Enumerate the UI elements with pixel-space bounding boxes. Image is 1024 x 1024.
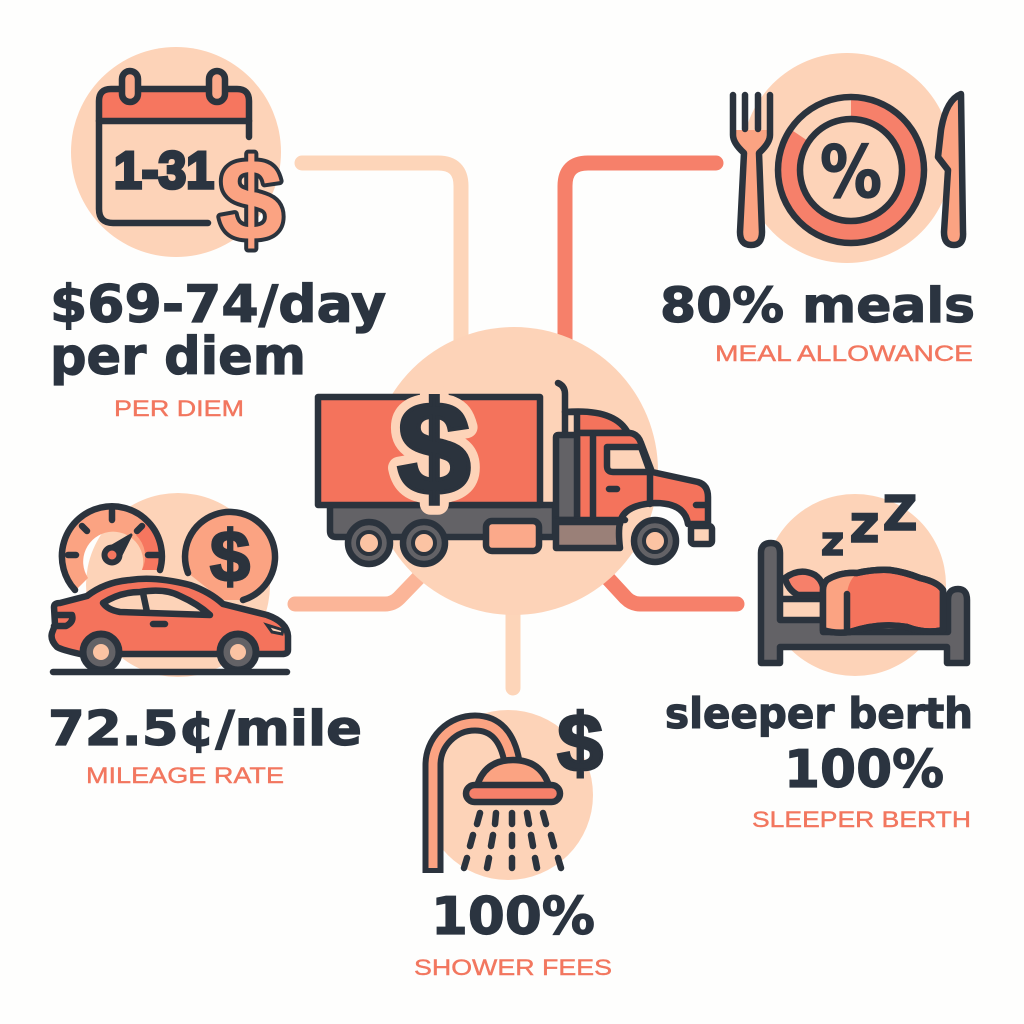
label: sleeper berth: SLEEPER BERTH — [752, 807, 971, 832]
icon: bed with zzz: z — [849, 495, 880, 555]
trailer dollar sign: $ — [397, 375, 471, 522]
connector: per diem to truck — [302, 163, 461, 345]
icon: speedometer, coin and car — [52, 493, 288, 677]
label: meal allowance: MEAL ALLOWANCE — [715, 341, 973, 366]
truck trailer — [318, 397, 540, 505]
icon: bed with zzz: z — [821, 519, 844, 565]
speedometer — [62, 505, 162, 590]
icon: plate and cutlery: % — [820, 130, 882, 214]
trailer dollar sign halo: $ — [397, 375, 471, 522]
icon: plate and cutlery — [733, 53, 963, 263]
connector: mileage to truck — [295, 572, 424, 604]
coin — [185, 512, 275, 600]
icon: shower with dollar — [423, 698, 603, 880]
truck cab — [565, 411, 628, 433]
icon: speedometer, coin and car: $ — [210, 517, 250, 597]
heading: sleeper 100 percent: 100% — [784, 740, 944, 800]
icon: calendar with dollar: $ — [219, 135, 283, 265]
truck tank — [486, 521, 539, 551]
heading: shower 100 percent: 100% — [431, 887, 595, 947]
heading: sleeper berth: sleeper berth — [665, 689, 973, 738]
connector: sleeper to truck — [602, 572, 737, 604]
connector: meals to truck — [565, 163, 716, 345]
icon: calendar with dollar — [71, 47, 283, 265]
heading: mileage rate value: 72.5¢/mile — [48, 701, 362, 757]
connector: shower to truck — [506, 600, 520, 688]
label: per diem: PER DIEM — [114, 396, 244, 421]
icon: shower with dollar: $ — [557, 698, 603, 789]
icon: bed with zzz: Z — [883, 486, 917, 542]
icon: bed with zzz — [761, 486, 967, 676]
label: shower fees: SHOWER FEES — [414, 955, 612, 980]
truck wheels — [348, 520, 676, 564]
icon: calendar with dollar: 1-31 — [114, 142, 214, 200]
car — [52, 579, 288, 654]
truck chassis — [330, 505, 555, 537]
heading: per diem line two: per diem — [50, 327, 306, 387]
label: mileage rate: MILEAGE RATE — [86, 763, 284, 788]
heading: meals: 80% meals — [660, 278, 975, 334]
heading: per diem value: $69-74/day — [50, 275, 386, 335]
central truck illustration — [318, 327, 712, 615]
